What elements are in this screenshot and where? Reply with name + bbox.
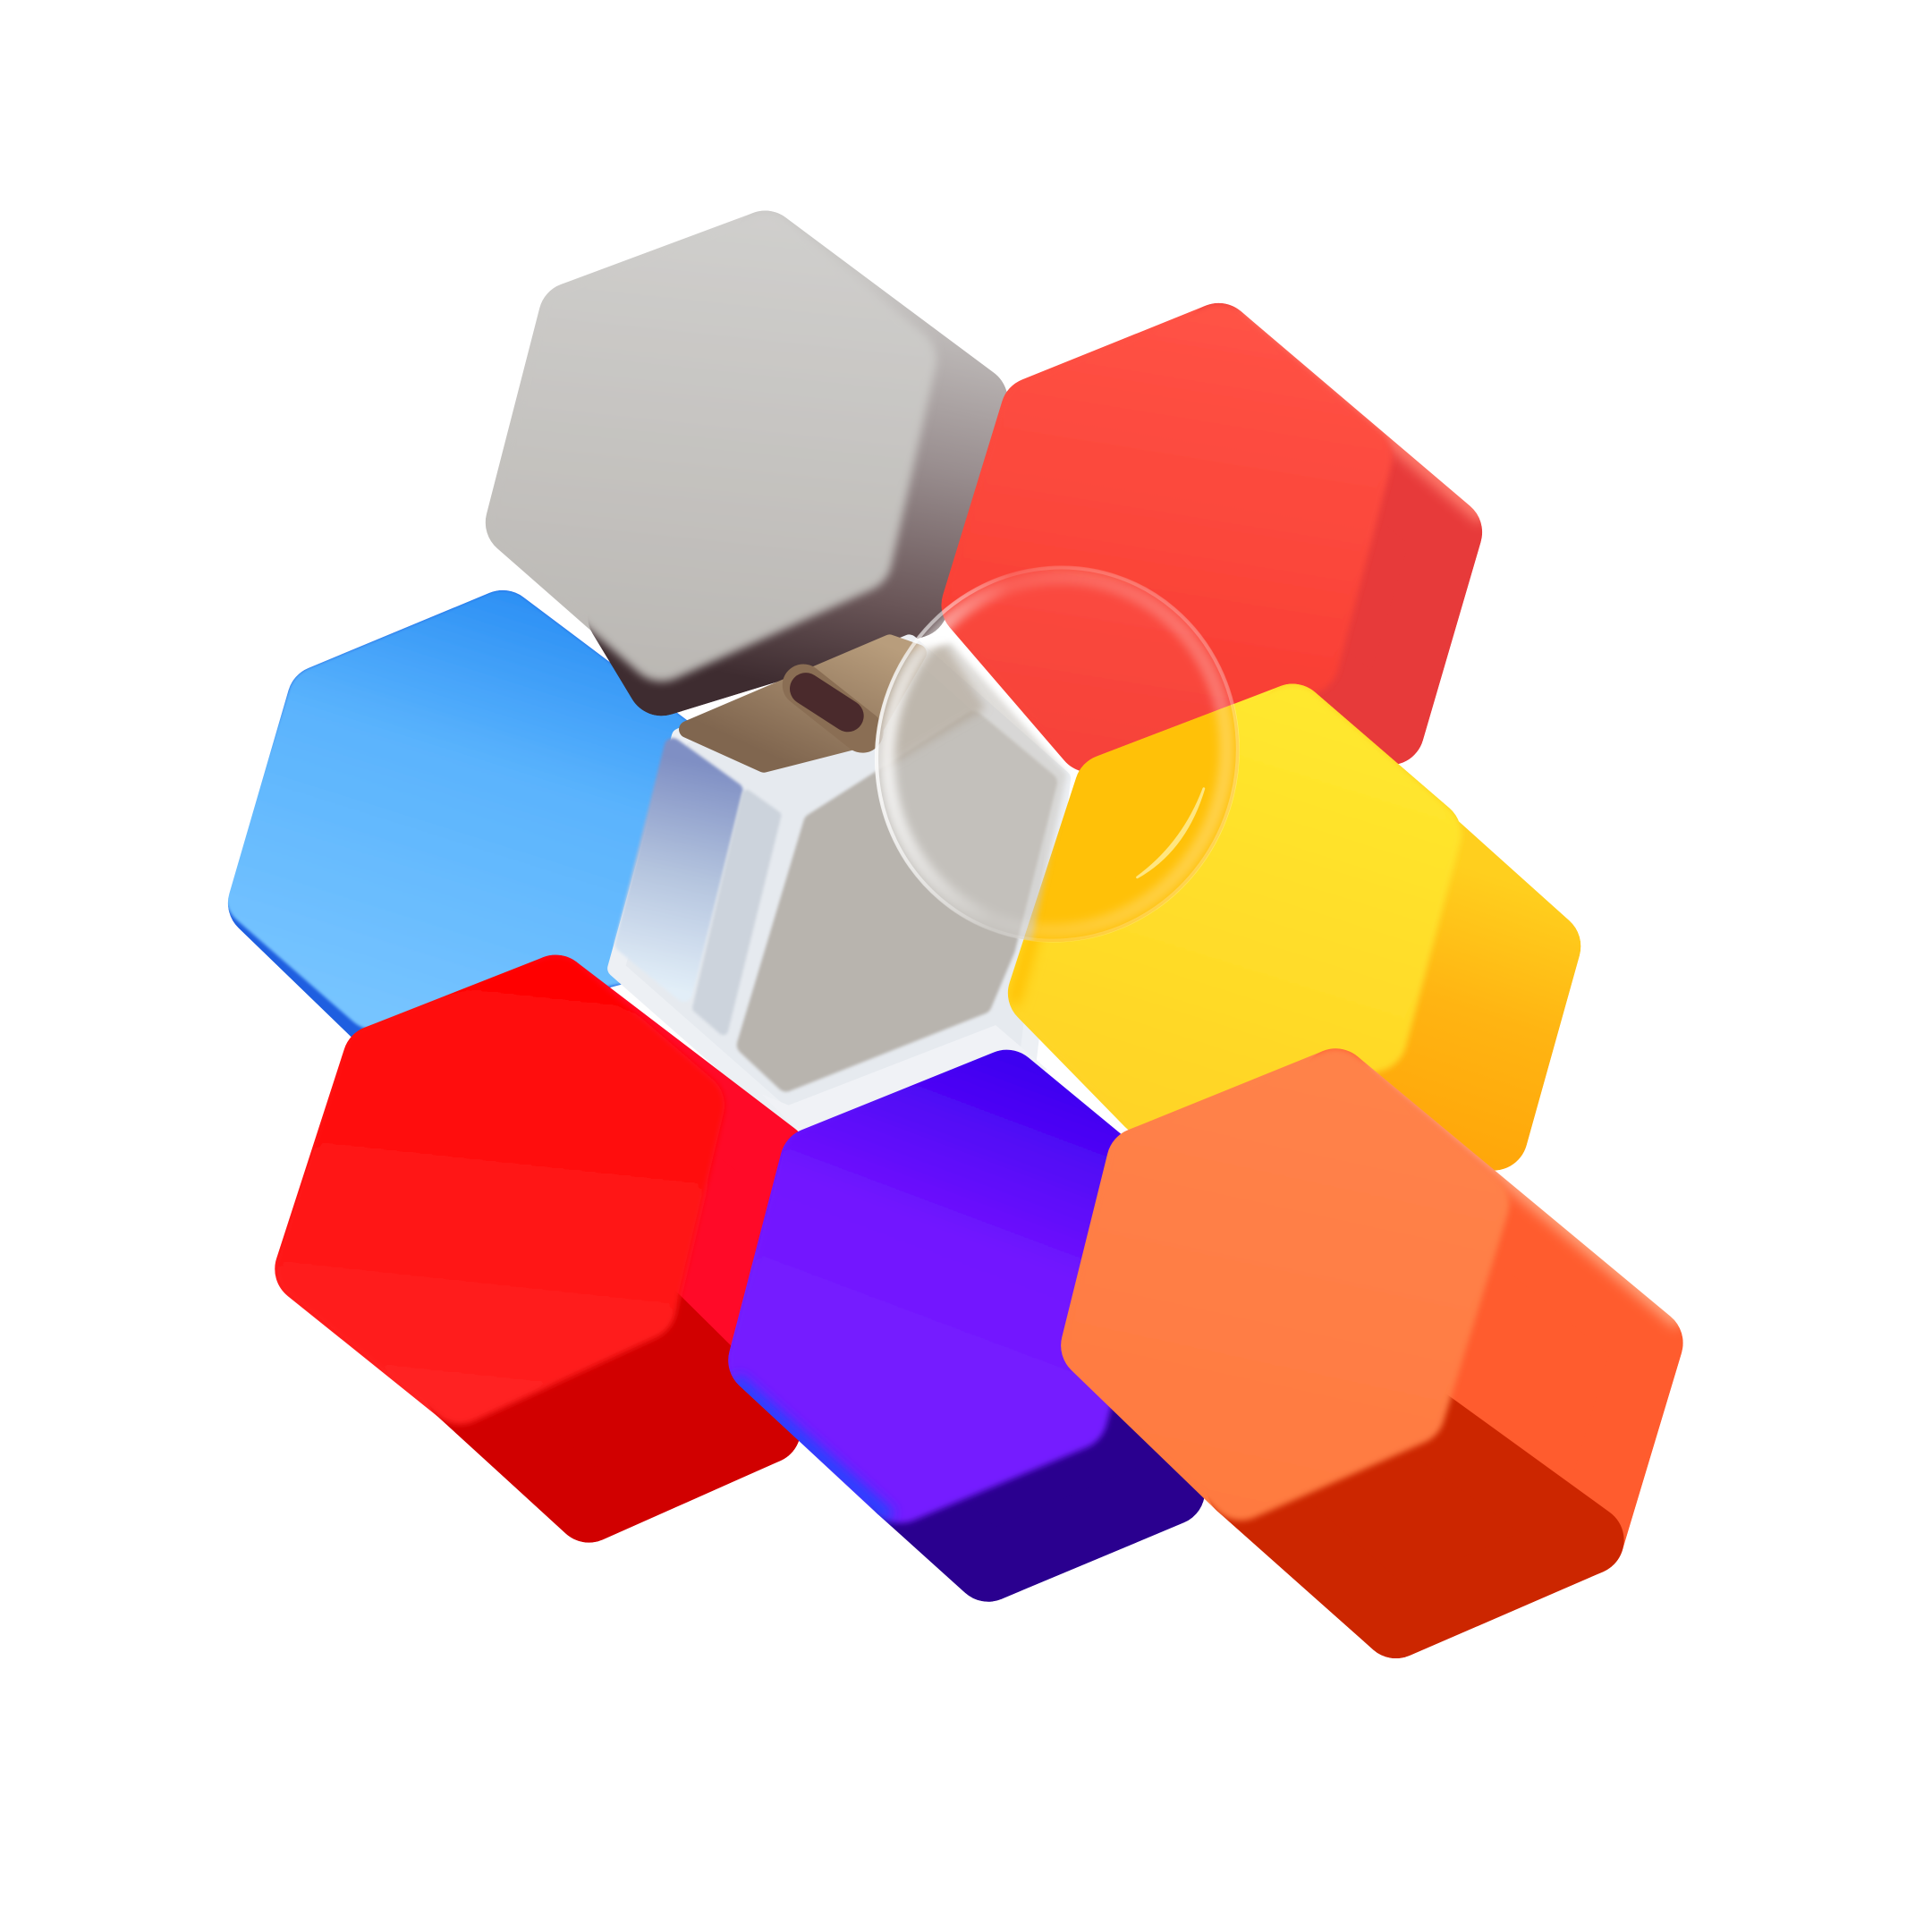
glass bottom strip <box>761 1025 1047 1140</box>
block: orange hexagon <box>1096 1060 1682 1624</box>
left edge shading <box>1013 770 1081 1004</box>
lens over glass <box>862 643 1067 949</box>
lens bubble <box>875 565 1240 943</box>
block: blue hexagon <box>260 624 672 1013</box>
lens highlight <box>1137 789 1204 877</box>
lower-left blue edge <box>734 1380 890 1518</box>
slot <box>803 685 862 732</box>
glass inner grey face <box>747 721 1047 1081</box>
lens tint over yellow <box>1023 704 1240 942</box>
illustration: hexagonal 3D blocks cluster <box>227 211 1683 1658</box>
top edge highlight <box>1238 308 1485 518</box>
block: violet hexagon <box>734 1084 1171 1567</box>
glass top face <box>688 643 918 764</box>
lens inner rim <box>878 569 1238 941</box>
block: red hexagon <box>309 989 774 1508</box>
lens tint over red <box>826 519 1288 989</box>
block: grey hexagon <box>520 245 973 682</box>
glass body <box>616 643 1062 1131</box>
top edge highlight <box>1368 1060 1682 1321</box>
block: glass cube <box>616 643 1062 1140</box>
glass middle strip <box>698 795 776 1030</box>
block: yellow hexagon <box>1013 718 1546 1136</box>
glass left panel <box>623 747 734 993</box>
block: coral red hexagon <box>976 308 1485 738</box>
lens rim <box>828 521 1286 987</box>
